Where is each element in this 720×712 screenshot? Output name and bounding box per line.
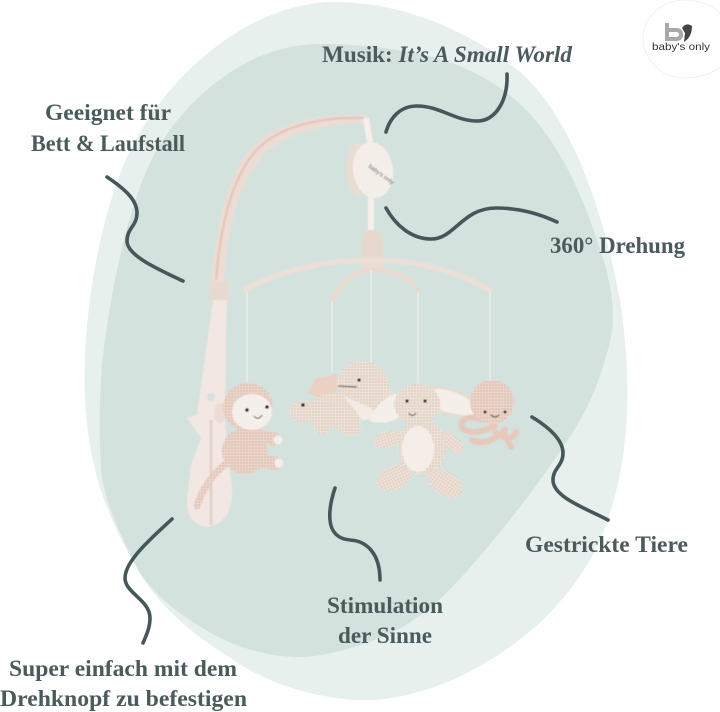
- connector: Musik: [386, 74, 507, 132]
- logo badge: baby's only: [643, 0, 720, 78]
- arm highlight: [216, 118, 364, 280]
- crib arm: [212, 114, 366, 282]
- hub collar: [362, 258, 383, 269]
- upper link: [366, 118, 370, 142]
- label: Super einfach mit dem Drehknopf zu befestigen: Drehknopf zu befestigen: [0, 686, 247, 711]
- label: Super einfach mit dem Drehknopf zu befestigen: Super einfach mit dem: [9, 656, 237, 681]
- label: Stimulation der Sinne: der Sinne: [338, 623, 432, 648]
- connector: Super einfach: [125, 519, 172, 643]
- connector: Stimulation: [330, 488, 380, 580]
- logo mark: [667, 23, 692, 42]
- lower post and paddle: [187, 300, 232, 527]
- background blob: outer light: [85, 2, 627, 700]
- label: Stimulation der Sinne: Stimulation: [327, 593, 443, 618]
- connector: 360 Drehung: [386, 208, 557, 239]
- lower link: [368, 197, 374, 232]
- logo wordmark: baby's only: [652, 41, 711, 53]
- hub bell: [361, 230, 383, 262]
- label: Geeignet für Bett & Laufstall: Geeignet für: [45, 100, 171, 125]
- arm clamp: [210, 281, 229, 301]
- label: Musik: Musik: It’s A Small World: [322, 42, 573, 67]
- toy: octopus: [461, 380, 516, 447]
- connector: Gestrickte Tiere: [532, 417, 608, 520]
- toy: bunny: [370, 384, 483, 504]
- label: Gestrickte Tiere: Gestrickte Tiere: [525, 532, 688, 557]
- label: 360° Drehung: 360° Drehung: [550, 233, 685, 258]
- lower arc: [332, 270, 418, 301]
- upper arc: [244, 260, 491, 291]
- strings: [247, 270, 490, 384]
- music box: [346, 139, 397, 201]
- label: Stimulation der Sinne: [327, 593, 443, 648]
- mobile product photo: [187, 114, 516, 527]
- connector: Geeignet: [107, 177, 183, 281]
- label: Geeignet für Bett & Laufstall: Bett & Laufstall: [31, 131, 185, 156]
- toy: monkey: [197, 383, 284, 506]
- label: Geeignet für Bett & Laufstall: [31, 100, 185, 156]
- label: Super einfach mit dem Drehknopf zu befestigen: [0, 656, 247, 711]
- post hole: [207, 393, 215, 401]
- toy: whale: [337, 361, 390, 420]
- post shade: [210, 420, 212, 525]
- background blob: inner mint: [100, 44, 613, 657]
- toy: dinosaur: [290, 373, 361, 435]
- box logo text: baby's only: [367, 164, 394, 186]
